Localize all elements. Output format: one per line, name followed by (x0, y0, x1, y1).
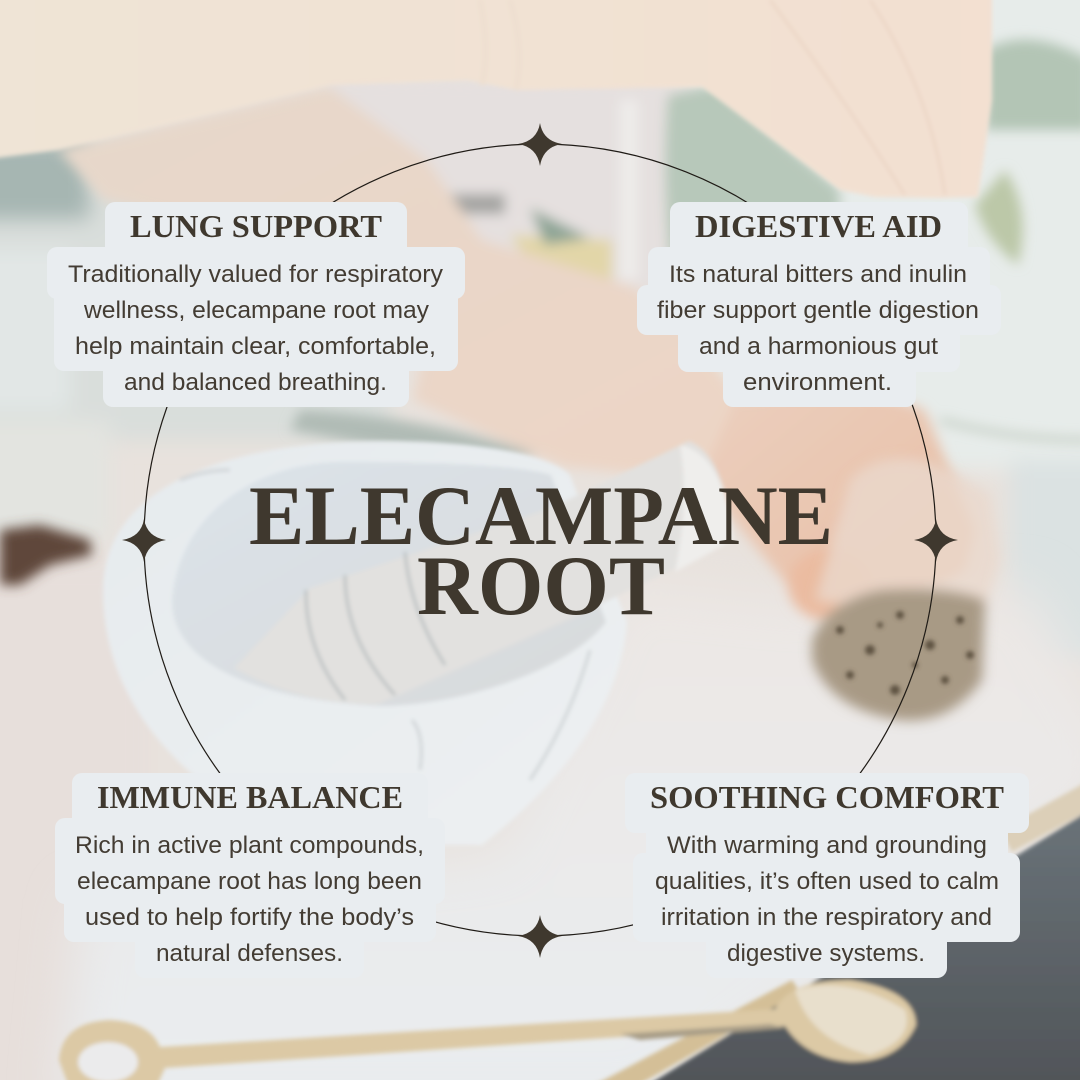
text: immune balance: natural defenses. (156, 940, 343, 967)
main title: ELECAMPANE (249, 469, 833, 563)
heading: soothing comfort: SOOTHING COMFORT (650, 779, 1004, 815)
text: immune balance: elecampane root has long been (77, 868, 422, 895)
text: lung support: Traditionally valued for respiratory (68, 261, 443, 288)
text: soothing comfort: qualities, it’s often used to calm (655, 868, 999, 895)
star ornament: top (518, 123, 562, 166)
glass jar (815, 458, 1000, 610)
upper forearm and hand (0, 0, 992, 198)
panel: lung support (47, 202, 465, 407)
granite counter (640, 810, 1080, 1080)
text: soothing comfort: digestive systems. (727, 940, 925, 967)
main title (249, 469, 833, 633)
pestle (234, 441, 733, 704)
lower arm and palm (58, 87, 790, 480)
panel: immune balance (55, 773, 445, 978)
marble tray (60, 580, 1080, 1080)
text: digestive aid: and a harmonious gut (699, 333, 938, 360)
text: lung support: wellness, elecampane root may (83, 297, 429, 324)
text: digestive aid (657, 261, 979, 396)
text: digestive aid: environment. (743, 369, 892, 396)
main title: ROOT (417, 539, 665, 633)
heading: lung support: LUNG SUPPORT (130, 208, 382, 244)
leaves (665, 85, 840, 290)
text: lung support (68, 261, 443, 396)
circular ring connecting the benefits (144, 144, 936, 936)
product bag (330, 80, 700, 290)
jar seeds (836, 626, 844, 634)
text: immune balance: used to help fortify the body’s (85, 904, 414, 931)
text: soothing comfort: irritation in the respiratory and (661, 904, 992, 931)
brass spoon (59, 980, 916, 1080)
mortar bowl (103, 441, 627, 845)
text: digestive aid: Its natural bitters and inulin (669, 261, 967, 288)
star ornament: bottom (518, 915, 562, 958)
text: lung support: help maintain clear, comfortable, (75, 333, 436, 360)
text: soothing comfort (655, 832, 999, 967)
text: digestive aid: fiber support gentle digestion (657, 297, 979, 324)
clove (0, 525, 92, 585)
panel: digestive aid (637, 202, 1001, 407)
heading: digestive aid: DIGESTIVE AID (695, 208, 942, 244)
star ornament: left (122, 519, 166, 562)
star ornament: right (914, 519, 958, 562)
text: immune balance: Rich in active plant compounds, (75, 832, 424, 859)
text: soothing comfort: With warming and grounding (667, 832, 987, 859)
text: immune balance (75, 832, 424, 967)
text: lung support: and balanced breathing. (124, 369, 387, 396)
panel: soothing comfort (625, 773, 1029, 978)
heading: immune balance: IMMUNE BALANCE (97, 779, 403, 815)
